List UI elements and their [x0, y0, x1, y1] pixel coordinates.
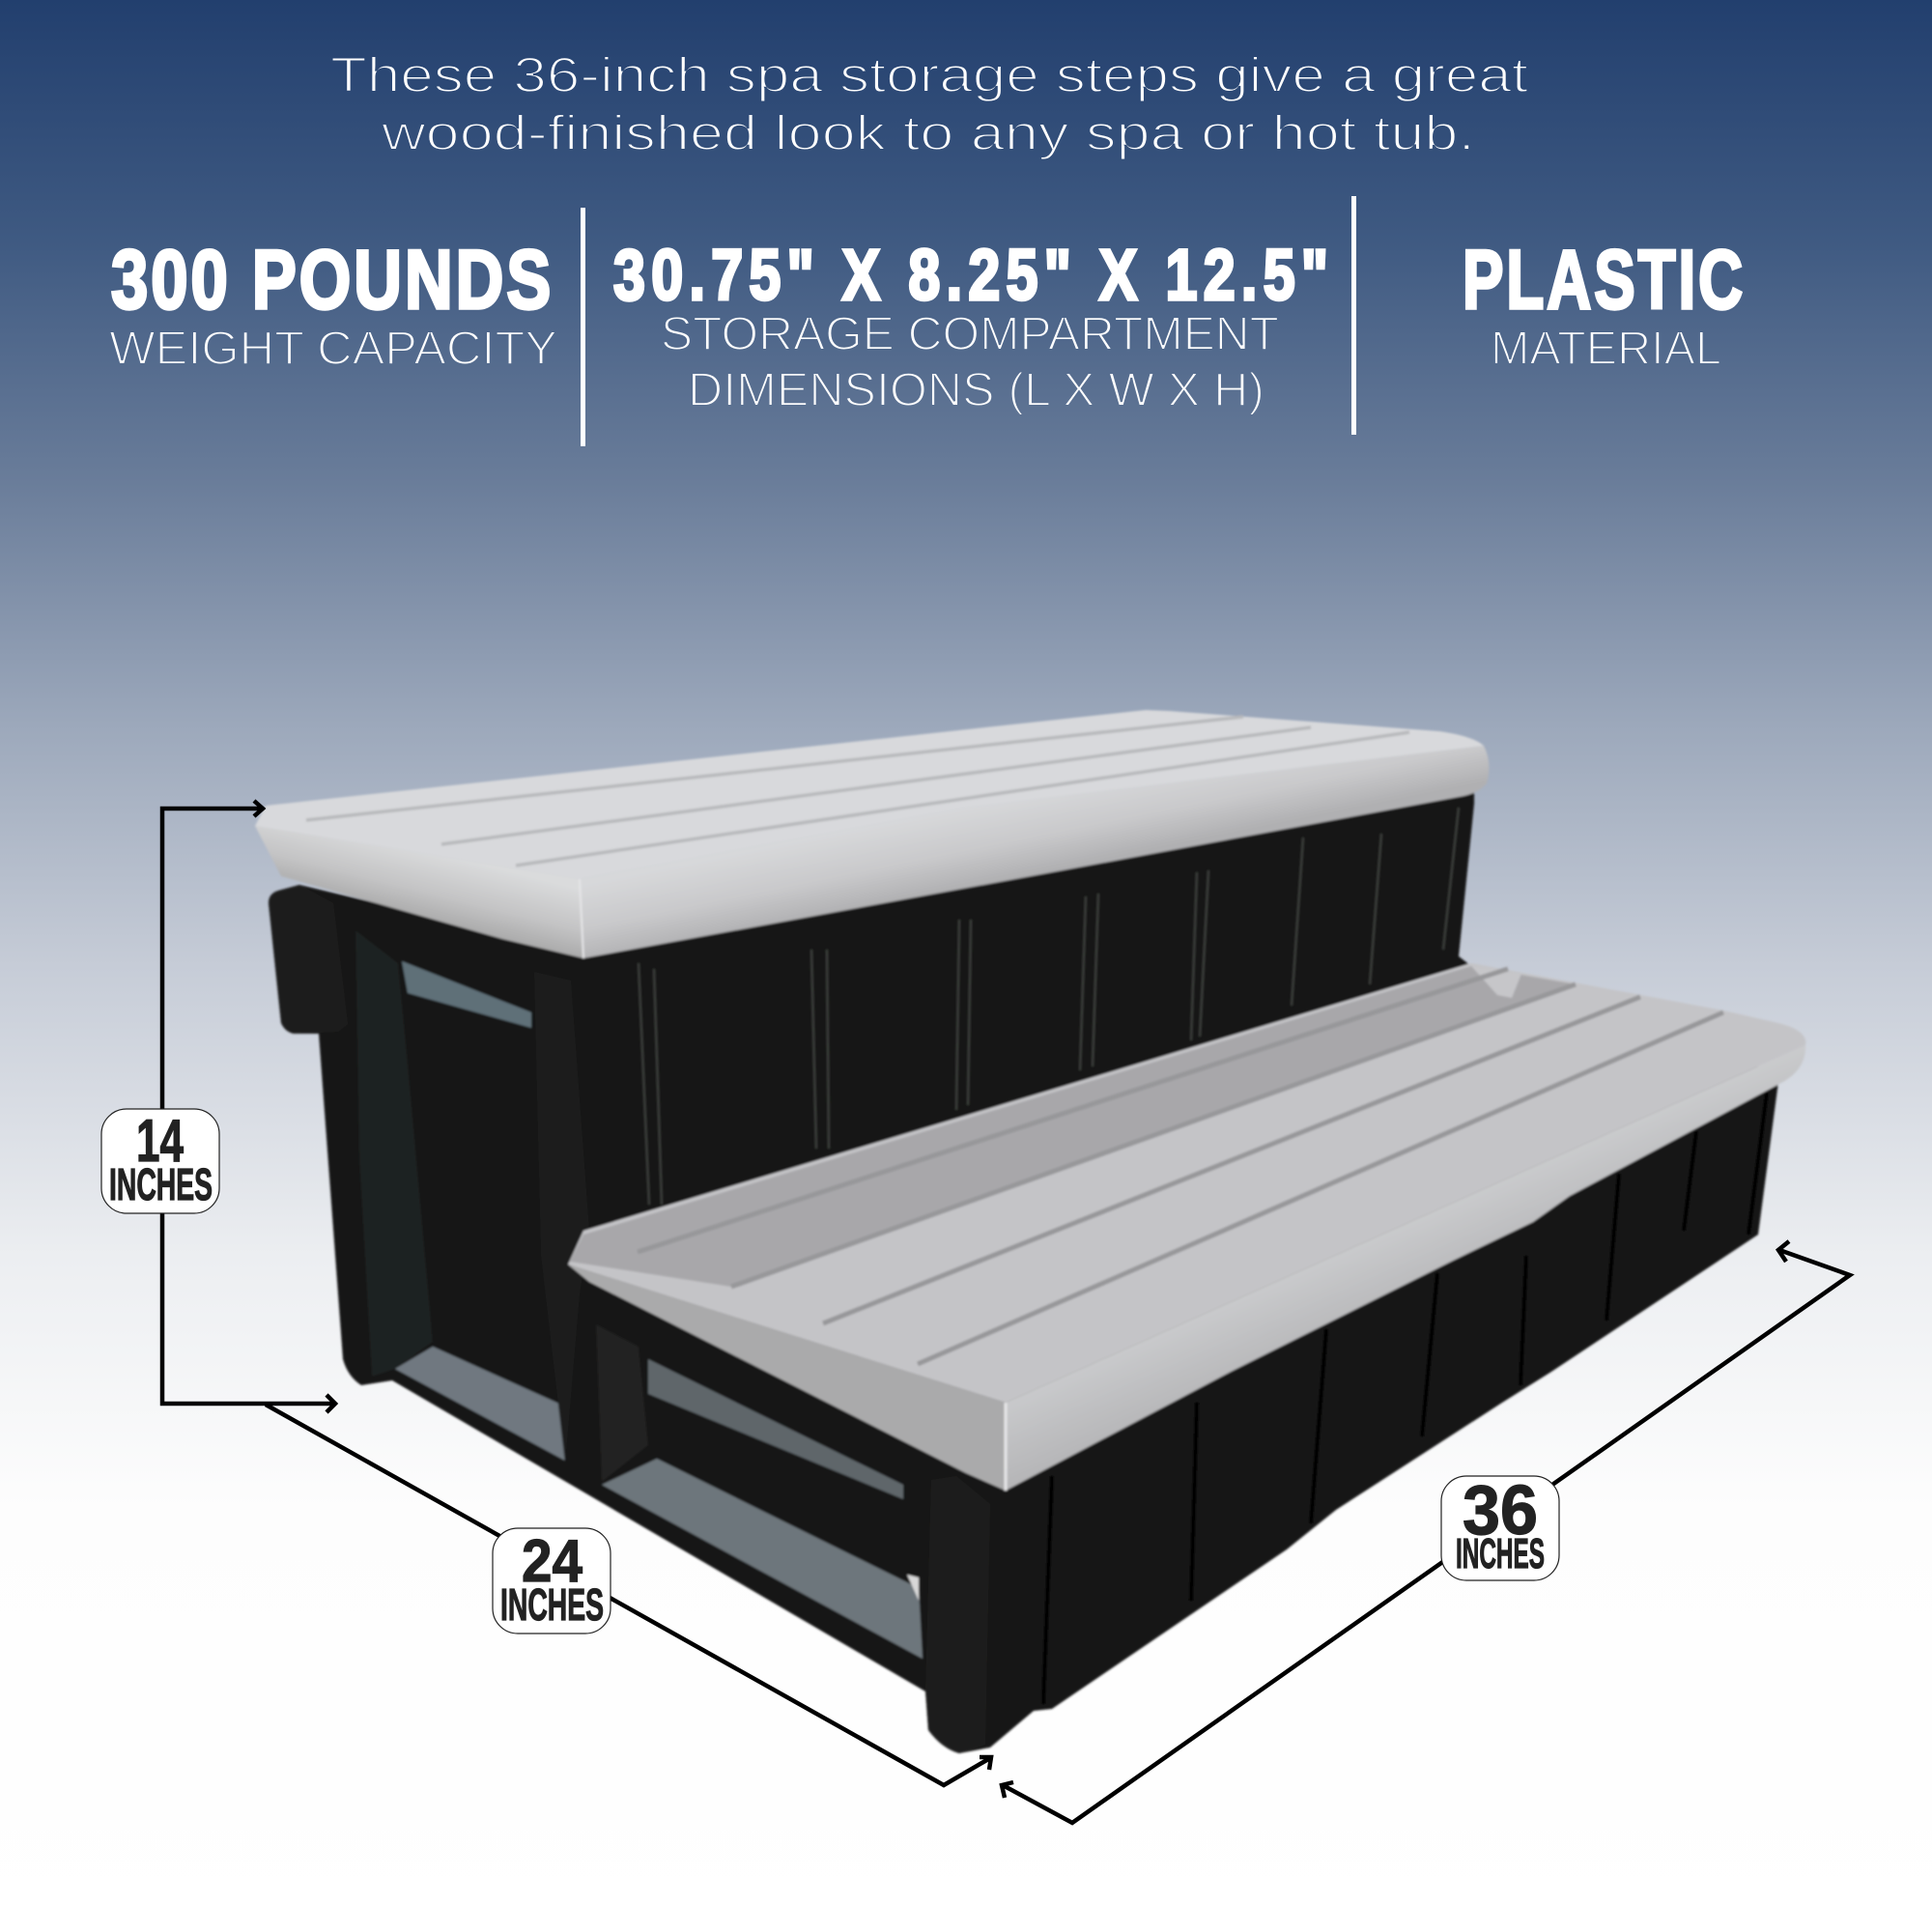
badge: 36 inches — [1441, 1472, 1559, 1580]
spec: material: PLASTIC — [1463, 235, 1743, 327]
spec: material — [1463, 235, 1743, 375]
arrow: 24 inch width — [266, 1405, 991, 1785]
lower tread front rim — [1006, 1045, 1805, 1491]
upper tread front rim — [580, 746, 1489, 958]
badge: 24 inches — [493, 1528, 611, 1634]
badge: 36 inches: INCHES — [1456, 1530, 1545, 1577]
side strip bottom — [395, 1347, 565, 1461]
spec: storage compartment dimensions — [613, 236, 1328, 416]
lower tread grooves — [638, 969, 1723, 1364]
spec: weight capacity: WEIGHT CAPACITY — [109, 323, 557, 375]
badge: 14 inches — [101, 1108, 219, 1213]
lower inner panel — [648, 1394, 916, 1573]
lower side column — [596, 1324, 648, 1482]
badge: 14 inches: 14 — [136, 1108, 184, 1175]
side strip top — [402, 961, 531, 1028]
badge: 24 inches: 24 — [522, 1528, 582, 1595]
intro text — [330, 47, 1528, 160]
spec: material: MATERIAL — [1491, 323, 1721, 375]
lower tread top — [568, 963, 1805, 1403]
left side frame — [355, 930, 433, 1377]
badge: 36 inches: 36 — [1463, 1472, 1538, 1549]
upper tread top — [255, 710, 1484, 879]
lower upper strip — [648, 1359, 903, 1499]
lower tread highlight — [1471, 966, 1521, 998]
badge: 14 inches: INCHES — [109, 1159, 213, 1209]
lower tread — [568, 963, 1805, 1491]
intro text: These 36-inch spa storage steps give a great — [330, 47, 1528, 102]
riser grooves upper — [639, 808, 1459, 1205]
side handle block — [269, 885, 348, 1034]
divider right — [1351, 196, 1356, 435]
arrow: 36 inch length — [1002, 1241, 1850, 1823]
lower tread shaded back — [570, 966, 1576, 1287]
product: spa steps — [255, 710, 1805, 1753]
arrow: 14 inch height — [162, 801, 335, 1412]
spec: weight capacity: 300 POUNDS — [111, 234, 551, 327]
intro text: wood-finished look to any spa or hot tub. — [381, 105, 1475, 160]
lower tread left rim — [568, 1264, 1006, 1491]
body silhouette — [269, 787, 1779, 1753]
spec: weight capacity — [109, 234, 557, 375]
riser grooves lower — [1043, 1093, 1767, 1704]
left side inner panel — [408, 993, 558, 1403]
upper tread left rim — [255, 826, 583, 958]
corner highlight — [580, 879, 583, 958]
spec: storage compartment dimensions: STORAGE COMPARTMENT — [661, 308, 1279, 360]
corner post — [925, 1476, 990, 1753]
upper tread — [255, 710, 1489, 1491]
center post — [534, 972, 589, 1463]
lower bottom strip — [602, 1459, 923, 1659]
upper tread grooves — [306, 717, 1409, 866]
spec: storage compartment dimensions: DIMENSIONS (L X W X H) — [688, 364, 1264, 416]
divider left — [581, 208, 585, 446]
spec: storage compartment dimensions: 30.75" X 8.25" X 12.5" — [613, 236, 1328, 316]
white triangle — [907, 1575, 919, 1601]
badge: 24 inches: INCHES — [500, 1579, 604, 1630]
